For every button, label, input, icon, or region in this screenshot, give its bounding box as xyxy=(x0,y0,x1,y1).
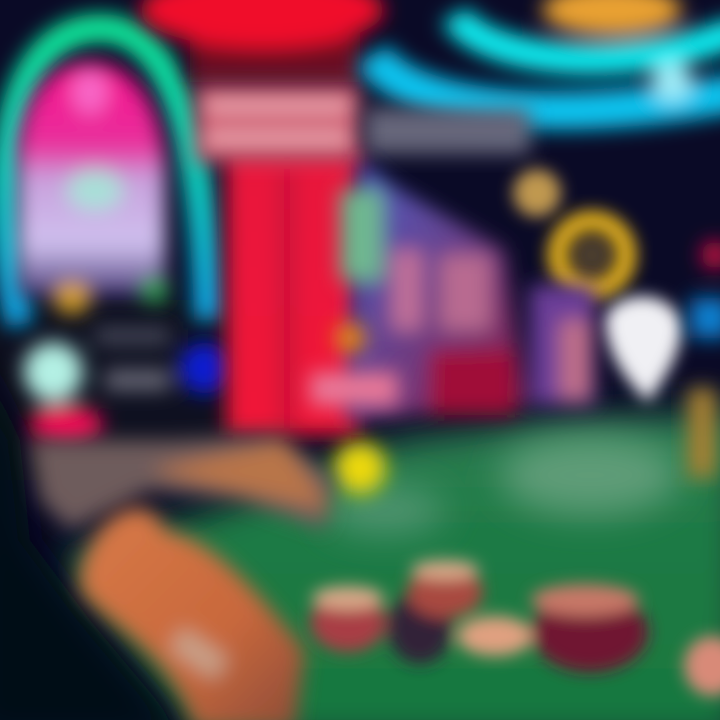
right edge details xyxy=(688,241,720,478)
tower cap xyxy=(140,0,384,82)
colourful building xyxy=(340,160,595,420)
coin small xyxy=(513,169,561,217)
poker chips xyxy=(310,560,720,696)
lower hand xyxy=(80,508,305,720)
neon arch xyxy=(5,28,208,325)
cyan swirl xyxy=(372,0,720,111)
pink dome xyxy=(18,62,169,314)
tower column xyxy=(226,150,358,435)
tower base lights xyxy=(310,323,398,494)
green felt table xyxy=(60,412,720,720)
white pin xyxy=(604,296,682,402)
sign band xyxy=(195,84,360,162)
grey sign xyxy=(365,108,530,154)
upper hand xyxy=(30,435,335,530)
felt markings xyxy=(325,435,680,534)
panel under the arch xyxy=(23,328,231,445)
coin large xyxy=(558,221,626,289)
dark foreground arm xyxy=(0,330,190,720)
red tower xyxy=(140,0,384,435)
